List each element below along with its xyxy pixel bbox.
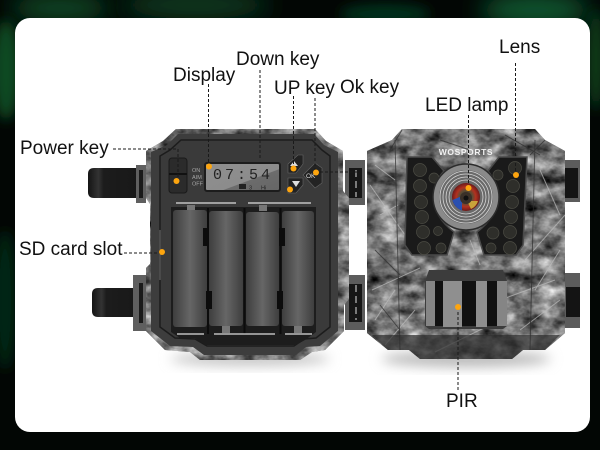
latch: upper <box>88 165 146 203</box>
OK key: OK <box>306 173 316 180</box>
power switch: OFF <box>192 182 204 188</box>
label: Lens: Lens <box>499 37 540 58</box>
LCD display: 3 <box>249 186 252 192</box>
label: Ok key: Ok key <box>340 77 400 98</box>
inner panel <box>151 134 338 355</box>
camo branch lines <box>370 130 565 352</box>
LCD display <box>205 163 280 192</box>
latch: lower <box>92 275 146 331</box>
leader lines <box>113 63 516 392</box>
left camera: open interior <box>88 125 365 365</box>
down key <box>288 178 303 193</box>
power switch <box>169 158 204 193</box>
power switch: AIM <box>192 175 202 181</box>
camera lens <box>433 164 499 230</box>
LCD display: 07:54 <box>213 167 273 184</box>
hinge: right side <box>563 160 580 328</box>
UP key <box>288 155 303 173</box>
IR panel: right <box>477 157 527 255</box>
camo body <box>367 129 565 359</box>
IR panel: left <box>405 157 454 255</box>
brand name: WOSPORTS <box>439 147 493 157</box>
right camera: camo front <box>360 125 580 365</box>
battery bay <box>171 207 316 345</box>
PIR sensor <box>425 270 507 329</box>
hinge: right side <box>345 160 365 330</box>
orange callout dots <box>159 164 519 310</box>
SD card slot strip <box>159 230 161 280</box>
label: UP key: UP key <box>274 78 335 99</box>
label: Down key: Down key <box>236 49 320 70</box>
power switch: ON <box>192 168 200 174</box>
label: LED lamp: LED lamp <box>425 95 508 116</box>
OK key <box>303 163 322 188</box>
LCD display: Hi <box>261 186 266 192</box>
label: Power key: Power key <box>20 138 109 159</box>
batteries <box>173 203 314 334</box>
label: SD card slot: SD card slot <box>19 239 123 260</box>
label: Display: Display <box>173 65 236 86</box>
bottom dark band <box>372 335 560 359</box>
drop shadows under cameras <box>170 351 551 367</box>
outer shell <box>146 129 349 360</box>
label: PIR: PIR <box>446 391 478 412</box>
